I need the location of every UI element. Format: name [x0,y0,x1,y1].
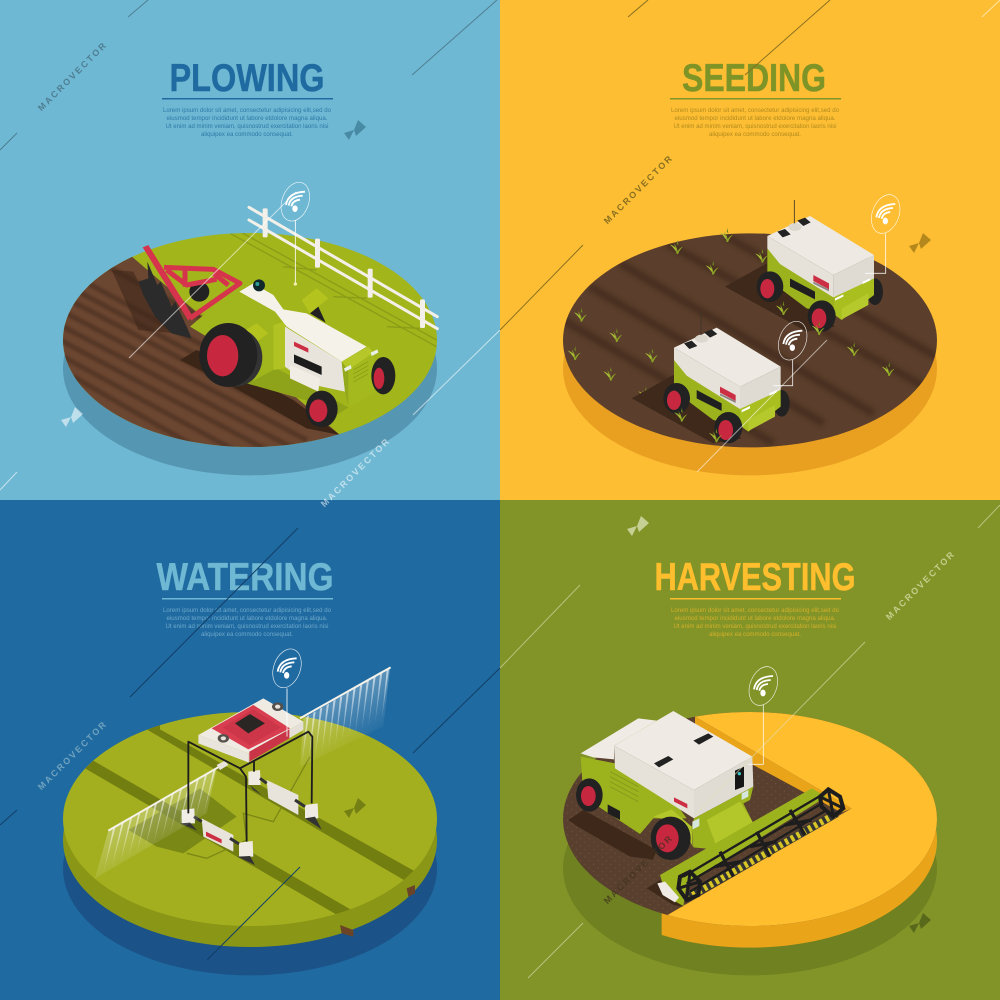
panel: seeding [500,0,1000,500]
spray booms [95,667,391,878]
fence [230,207,437,347]
text block: harvesting description: Ut enim ad minim veniam, quisnostrud exercitation laoris nisi [674,623,836,630]
illustration: watering disc and gantry [63,645,437,975]
robot: far seeder [725,200,883,332]
header reel [657,788,843,906]
text block: seeding description: aliquipex ea commodo consequat. [709,131,801,138]
illustration: harvesting disc and combine [563,663,937,975]
panel: plowing [0,0,500,500]
text block: seeding description [671,107,839,138]
sprinkler cart front [180,808,255,865]
panel: watering [0,500,500,1000]
robot: near seeder [632,312,790,443]
spray shadow [128,788,237,853]
text block: harvesting description [671,607,839,638]
text block: plowing description: Lorem ipsum dolor sit amet, consectetur adipisicing elit,sed do [163,107,331,114]
title: seeding: SEEDING [682,57,826,100]
icon: wifi signal [268,645,306,692]
title: plowing: PLOWING [170,57,324,100]
text block: plowing description: aliquipex ea commodo consequat. [201,131,293,138]
watermark text [36,40,956,906]
text block: harvesting description: eiusmod tempor incididunt ut labore etdolore magna aliqua. [674,615,836,622]
illustration: plowing disc and tractor [40,178,437,475]
text block: watering description: Ut enim ad minim veniam, quisnostrud exercitation laoris nisi [166,623,328,630]
text block: harvesting description: Lorem ipsum dolor sit amet, consectetur adipisicing elit,sed do [671,607,839,614]
combine harvester [576,711,753,860]
text block: watering description: eiusmod tempor incididunt ut labore etdolore magna aliqua. [166,615,328,622]
plants behind robots [568,228,895,401]
gantry control box [198,698,303,762]
watermark text: MACROVECTOR [602,833,674,906]
text block: harvesting description: aliquipex ea commodo consequat. [709,631,801,638]
text block: plowing description [163,107,331,138]
watermark text: MACROVECTOR [884,549,956,622]
title: watering: WATERING [156,556,334,599]
text block: watering description [163,607,331,638]
icon: wifi near robot [773,317,812,364]
plants in front of robots [674,301,825,442]
text block: seeding description: eiusmod tempor incididunt ut labore etdolore magna aliqua. [674,115,836,122]
text block: plowing description: Ut enim ad minim veniam, quisnostrud exercitation laoris nisi [166,123,328,130]
text block: seeding description: Lorem ipsum dolor sit amet, consectetur adipisicing elit,sed do [671,107,839,114]
illustration: seeding disc and robots [563,191,937,475]
watermark text: MACROVECTOR [602,153,674,226]
icon: wifi far robot [866,191,905,237]
text block: seeding description: Ut enim ad minim veniam, quisnostrud exercitation laoris nisi [674,123,836,130]
watermark logos [61,120,931,933]
watermark text: MACROVECTOR [319,436,391,509]
tractor [190,279,395,427]
text block: watering description: Lorem ipsum dolor sit amet, consectetur adipisicing elit,sed do [163,607,331,614]
text block: plowing description: eiusmod tempor incididunt ut labore etdolore magna aliqua. [166,115,328,122]
icon: wifi signal [276,178,315,225]
gantry frame [188,732,312,842]
icon: wifi signal [744,663,783,709]
sprinkler cart rear [248,770,322,829]
title: harvesting: HARVESTING [654,556,856,599]
watermark text: MACROVECTOR [36,719,108,792]
text block: watering description: aliquipex ea commodo consequat. [201,631,293,638]
panel: harvesting [500,500,1000,1000]
plow [138,245,240,338]
watermark text: MACROVECTOR [36,40,108,113]
